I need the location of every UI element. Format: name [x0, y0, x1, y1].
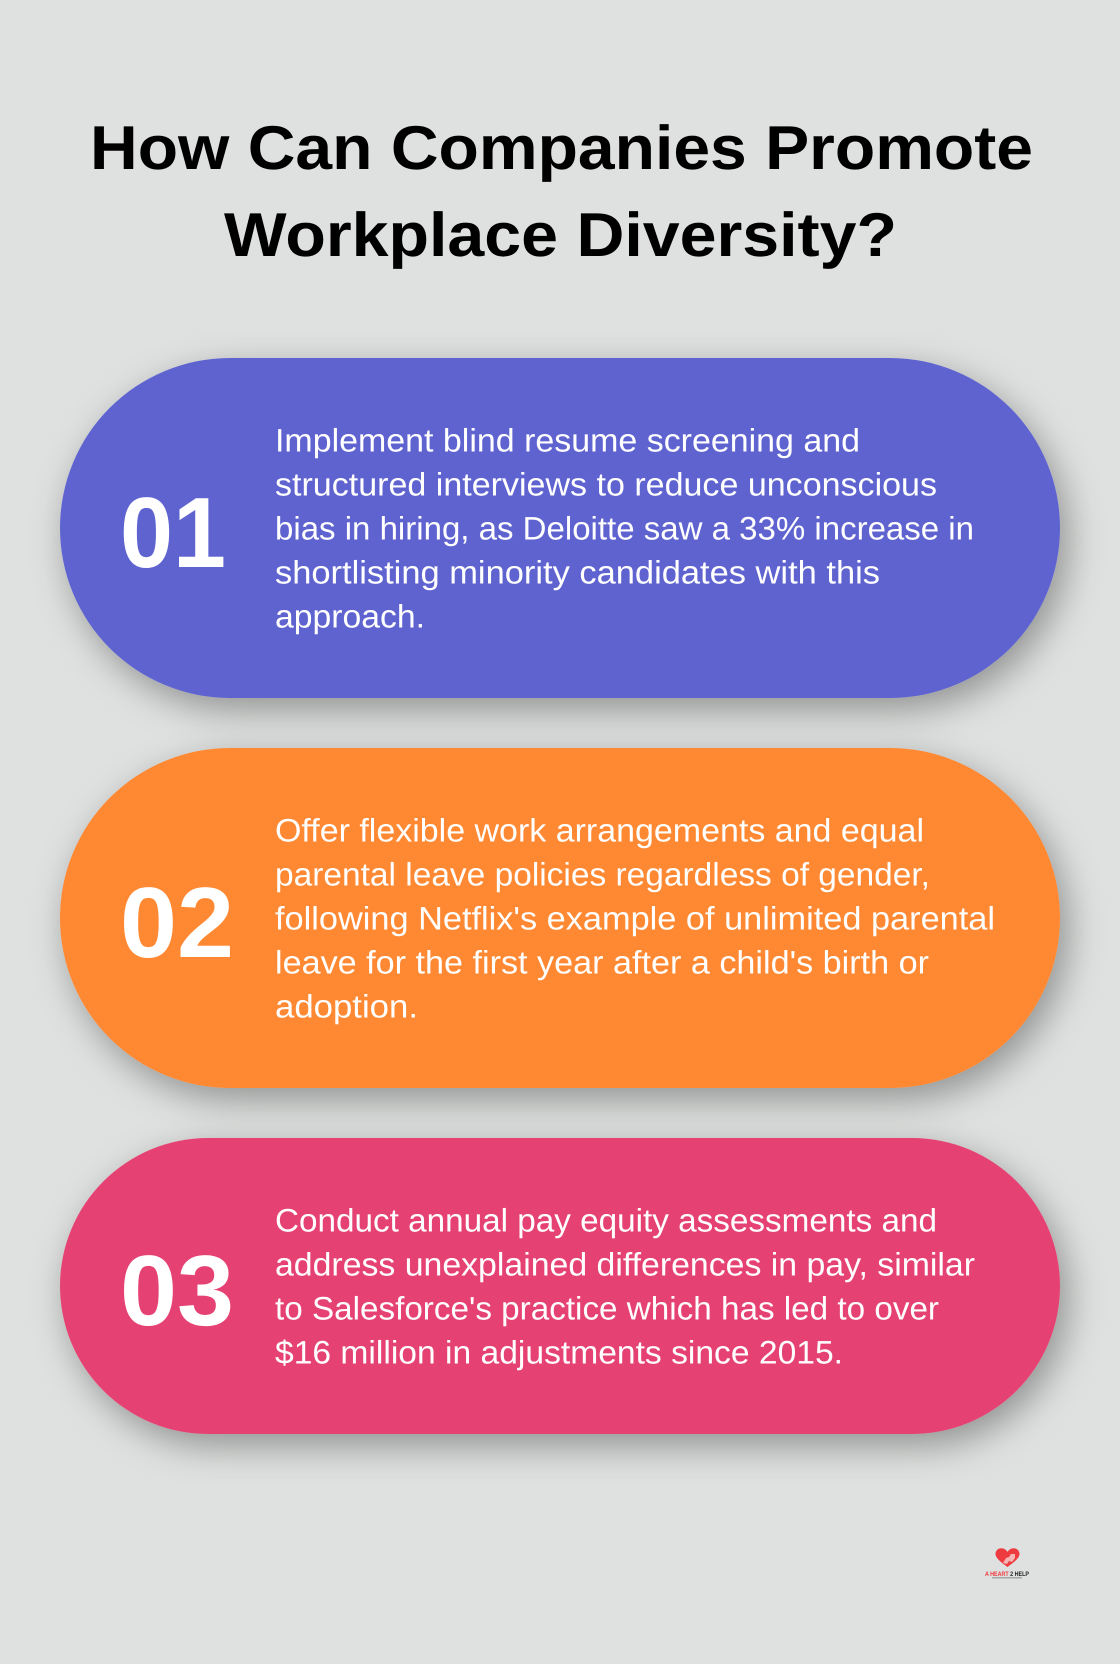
step 03 text: $16 million in adjustments since 2015. [275, 1334, 843, 1370]
title: How Can Companies Promote [90, 114, 1033, 183]
step 02 text: adoption. [275, 988, 418, 1024]
title [90, 114, 1033, 270]
number 02: 02 [120, 867, 234, 979]
panel: step 03 [60, 1138, 1060, 1434]
step 01 text: approach. [275, 598, 425, 634]
step 03 text [275, 1202, 975, 1370]
logo tagline [992, 1577, 1022, 1578]
step 01 text: Implement blind resume screening and [275, 422, 860, 458]
number 01: 01 [120, 477, 226, 589]
logo: A Heart 2 Help [985, 1548, 1030, 1578]
step 01 text [275, 422, 974, 634]
step 03 text: address unexplained differences in pay, similar [275, 1246, 975, 1282]
pill background orange [60, 748, 1060, 1088]
step 02 text: Offer flexible work arrangements and equal [275, 812, 924, 848]
step 02 text: following Netflix's example of unlimited parental [275, 900, 995, 936]
step 01 text: shortlisting minority candidates with this [275, 554, 880, 590]
title: Workplace Diversity? [224, 201, 897, 270]
step 01 text: bias in hiring, as Deloitte saw a 33% increase in [275, 510, 974, 546]
icon: hands inside heart [1003, 1554, 1015, 1564]
step 01 text: structured interviews to reduce unconscious [275, 466, 937, 502]
panel: step 01 [60, 358, 1060, 698]
step 03 text: Conduct annual pay equity assessments and [275, 1202, 937, 1238]
icon: heart [996, 1548, 1020, 1567]
step 03 text: to Salesforce's practice which has led to over [275, 1290, 939, 1326]
number 03: 03 [120, 1235, 234, 1347]
step 02 text: parental leave policies regardless of gender, [275, 856, 930, 892]
pill background purple [60, 358, 1060, 698]
logo wordmark: A HEART 2 HELP [985, 1571, 1030, 1578]
step 02 text: leave for the first year after a child's birth or [275, 944, 929, 980]
panel: step 02 [60, 748, 1060, 1088]
pill background pink [60, 1138, 1060, 1434]
step 02 text [275, 812, 995, 1024]
